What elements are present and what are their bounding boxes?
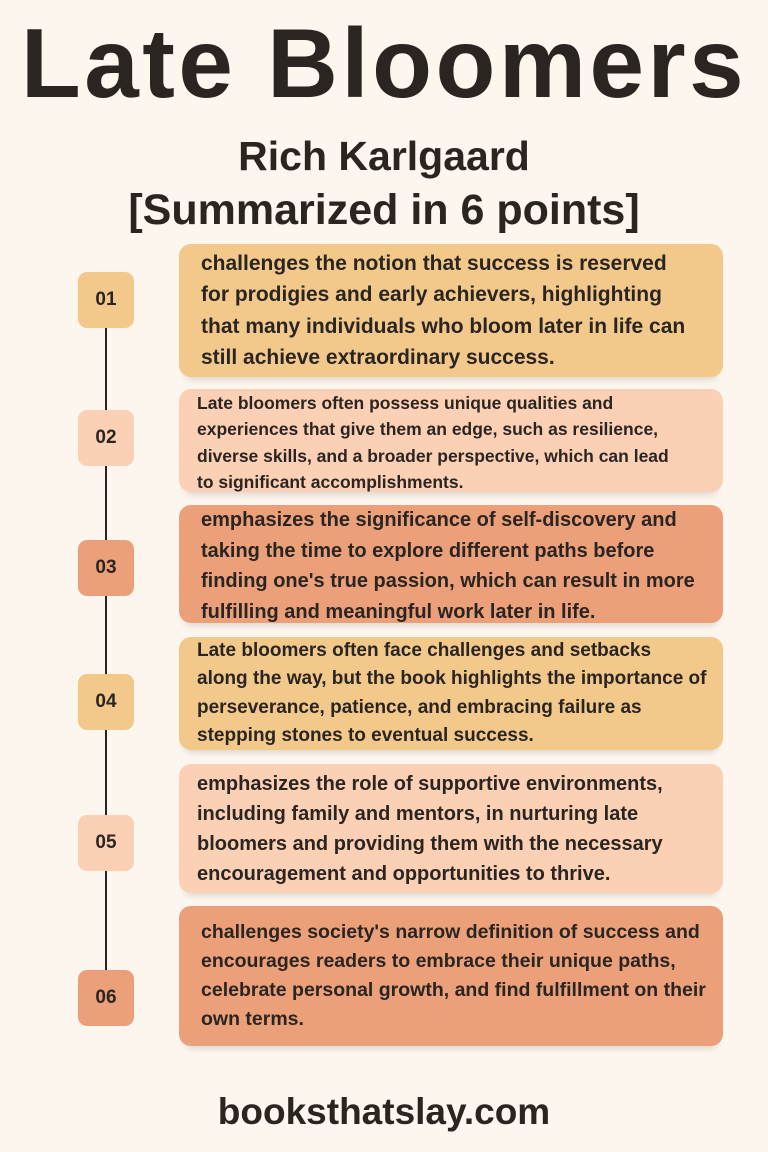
point 5 bbox=[179, 764, 723, 893]
point 1: for prodigies and early achievers, highlighting bbox=[201, 283, 662, 306]
point 3: taking the time to explore different paths before bbox=[201, 540, 654, 562]
title: Late Bloomers bbox=[21, 8, 747, 118]
badge 04 bbox=[78, 674, 134, 730]
point 4: perseverance, patience, and embracing failure as bbox=[197, 696, 642, 718]
badge 06 bbox=[78, 970, 134, 1026]
point 5: bloomers and providing them with the necessary bbox=[197, 832, 663, 854]
point 2: Late bloomers often possess unique qualities and bbox=[197, 392, 613, 412]
point 2: experiences that give them an edge, such as resilience, bbox=[197, 419, 658, 439]
point 5: encouragement and opportunities to thrive. bbox=[197, 862, 610, 884]
point 6: own terms. bbox=[201, 1008, 304, 1030]
point 4: along the way, but the book highlights the importance of bbox=[197, 668, 706, 689]
timeline line bbox=[105, 300, 107, 998]
badge 02: 02 bbox=[95, 427, 117, 448]
point 3: fulfilling and meaningful work later in life. bbox=[201, 600, 595, 622]
point 1: that many individuals who bloom later in life can bbox=[201, 314, 685, 338]
point 3: finding one's true passion, which can result in more bbox=[201, 570, 695, 592]
point 5: including family and mentors, in nurturing late bbox=[197, 802, 638, 824]
badge 05: 05 bbox=[95, 832, 117, 853]
point 6: celebrate personal growth, and find fulfillment on their bbox=[201, 979, 706, 1001]
point 6: challenges society's narrow definition of success and bbox=[201, 921, 700, 943]
point 1: challenges the notion that success is reserved bbox=[201, 252, 667, 274]
badge 01: 01 bbox=[95, 289, 117, 310]
badge 01 bbox=[78, 272, 134, 328]
badge 06: 06 bbox=[95, 987, 117, 1008]
point 1: still achieve extraordinary success. bbox=[201, 346, 555, 369]
point 6 bbox=[179, 906, 723, 1046]
badge 03: 03 bbox=[95, 557, 117, 578]
point 5: emphasizes the role of supportive environments, bbox=[197, 772, 663, 794]
subtitle: author: Rich Karlgaard bbox=[238, 133, 530, 179]
badge 02 bbox=[78, 410, 134, 466]
point 1 bbox=[179, 244, 723, 377]
point 4 bbox=[179, 637, 723, 750]
point 2: diverse skills, and a broader perspective, which can lead bbox=[197, 446, 669, 466]
footer: booksthatslay.com bbox=[218, 1091, 550, 1132]
badge 03 bbox=[78, 540, 134, 596]
badge 04: 04 bbox=[95, 691, 117, 712]
point 2: to significant accomplishments. bbox=[197, 472, 463, 492]
point 4: Late bloomers often face challenges and setbacks bbox=[197, 640, 651, 660]
point 4: stepping stones to eventual success. bbox=[197, 725, 534, 746]
point 3: emphasizes the significance of self-discovery and bbox=[201, 509, 677, 531]
point 6: encourages readers to embrace their unique paths, bbox=[201, 950, 676, 972]
subtitle: summary: [Summarized in 6 points] bbox=[128, 186, 640, 234]
point 2 bbox=[179, 389, 723, 492]
badge 05 bbox=[78, 815, 134, 871]
point 3 bbox=[179, 505, 723, 623]
